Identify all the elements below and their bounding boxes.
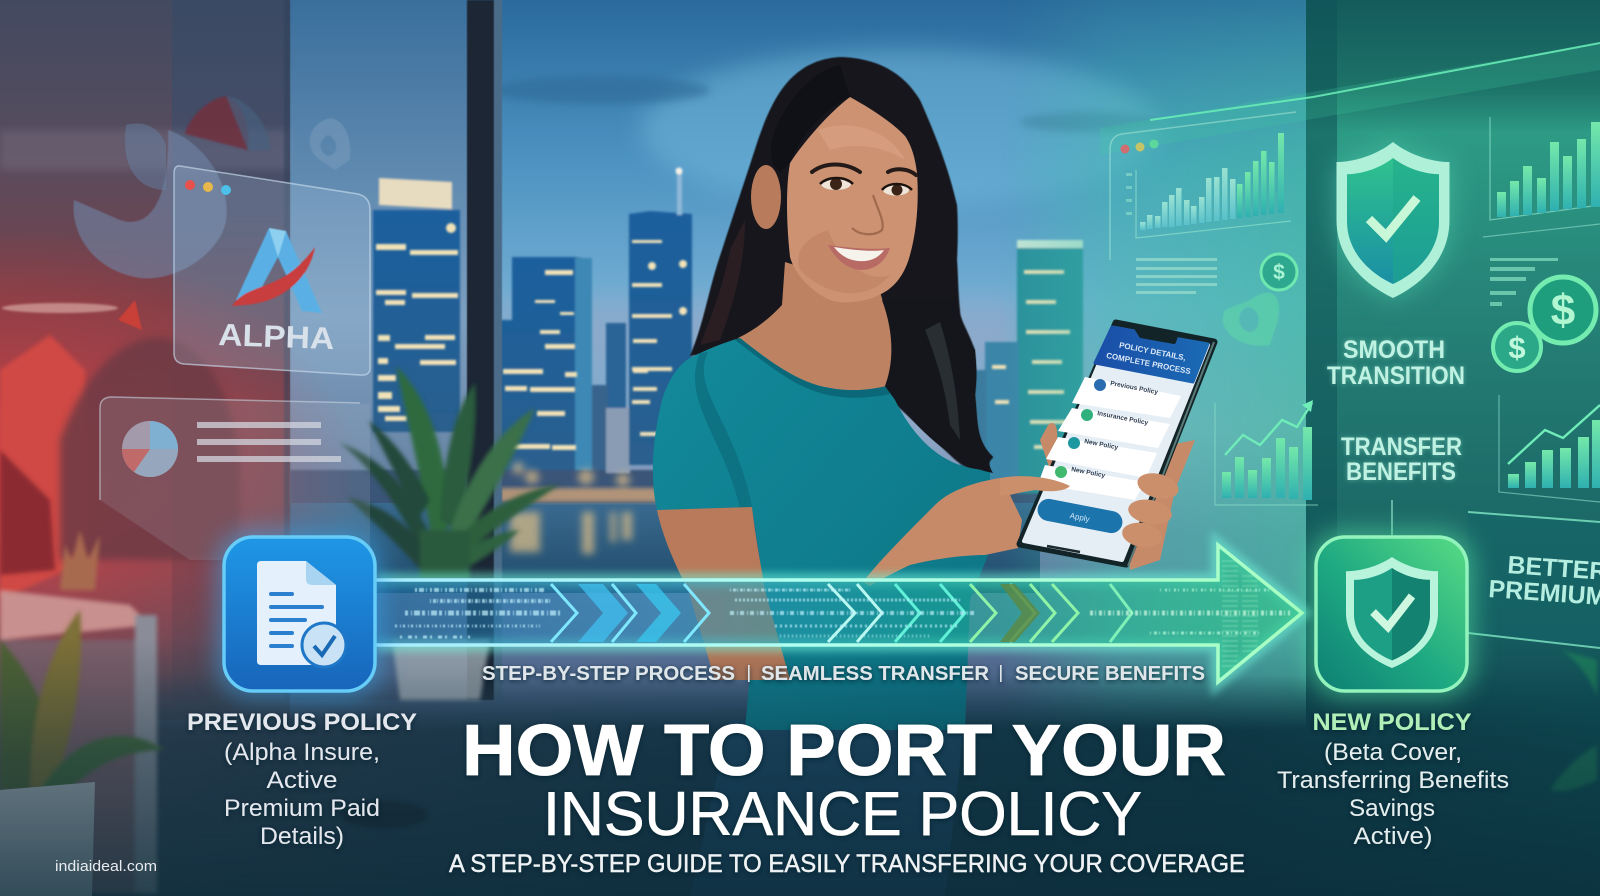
arrow body bbox=[376, 545, 1302, 682]
phone header text: POLICY DETAILS, bbox=[1118, 341, 1187, 362]
bar chart: top left bbox=[1126, 133, 1291, 238]
waterfront and reflections bbox=[280, 462, 1040, 593]
phone button bbox=[1036, 497, 1124, 535]
right interior wall bbox=[1000, 0, 1600, 740]
phone rows: Previous Policy bbox=[1110, 380, 1159, 396]
plant left foreground bbox=[0, 610, 165, 800]
face bbox=[787, 97, 918, 302]
tagline row: STEP-BY-STEP PROCESS bbox=[482, 663, 735, 685]
phone app mockup bbox=[1000, 323, 1214, 566]
line chart with bars: lower left bbox=[1215, 400, 1318, 505]
panel: green glass band and chart dashboard bbox=[1100, 43, 1600, 791]
arrow glow bbox=[376, 545, 1302, 682]
neck and chest bbox=[738, 262, 895, 390]
icon: new policy shield bbox=[1309, 530, 1474, 698]
better premium label bbox=[1468, 512, 1600, 648]
title bbox=[462, 711, 1226, 849]
icon: large dollar coins bbox=[1493, 277, 1596, 371]
right hand behind phone bbox=[1040, 423, 1195, 570]
alpha label: ALPHA bbox=[218, 317, 335, 356]
transfer benefits label: TRANSFER bbox=[1341, 433, 1462, 461]
window pillar bbox=[467, 0, 502, 700]
icon: dollar coin small bbox=[1261, 254, 1297, 290]
phone rows: Insurance Policy bbox=[1097, 410, 1149, 427]
new policy caption: Active) bbox=[1354, 823, 1432, 850]
front hair lock over shirt bbox=[882, 300, 993, 473]
icon: previous policy document bbox=[217, 530, 382, 698]
icon: large dollar coins: $ bbox=[1551, 286, 1575, 335]
new policy caption bbox=[1277, 709, 1509, 850]
left desk and plant scene bbox=[0, 450, 490, 896]
tagline row: SECURE BENEFITS bbox=[1015, 663, 1205, 685]
panel outline left dashboard bbox=[1110, 112, 1296, 260]
smooth transition label: TRANSITION bbox=[1327, 362, 1465, 390]
window dots green panel bbox=[1120, 140, 1158, 154]
smile bbox=[828, 245, 890, 270]
title: INSURANCE POLICY bbox=[543, 780, 1142, 849]
previous policy caption bbox=[187, 709, 417, 850]
new policy caption: NEW POLICY bbox=[1312, 709, 1472, 736]
previous policy caption: Premium Paid bbox=[224, 795, 380, 822]
bar chart: top right bbox=[1483, 117, 1600, 237]
front hair bbox=[771, 65, 850, 172]
window dots bbox=[185, 180, 231, 195]
office plant in front of window bbox=[340, 366, 560, 580]
phone rows bbox=[1038, 377, 1181, 500]
arrow outline bbox=[376, 545, 1302, 682]
previous policy caption: Details) bbox=[260, 823, 344, 850]
icon: alpha logo bbox=[232, 228, 322, 313]
progress arrow bbox=[376, 545, 1302, 682]
transfer benefits label: BENEFITS bbox=[1346, 458, 1456, 486]
shirt bbox=[653, 338, 990, 730]
panel: alpha insure window bbox=[174, 166, 370, 375]
floor bbox=[155, 680, 1600, 896]
bottom dark fade bbox=[0, 640, 1600, 896]
phone button: Apply bbox=[1069, 511, 1090, 524]
chevrons bbox=[551, 584, 1132, 642]
transfer benefits label bbox=[1341, 433, 1462, 486]
text lines left dashboard bbox=[1136, 258, 1217, 294]
watermark: indiaideal.com bbox=[55, 858, 157, 875]
left interior wall with red tint bbox=[0, 0, 360, 730]
foliage right edge bbox=[1550, 650, 1597, 791]
city skyline bbox=[280, 168, 1100, 593]
icon: large shield with check bbox=[1336, 142, 1450, 298]
smooth transition label bbox=[1327, 336, 1465, 390]
text lines bbox=[197, 422, 341, 462]
icon: dollar coin small: $ bbox=[1273, 261, 1285, 284]
ear bbox=[751, 165, 781, 229]
new policy caption: (Beta Cover, bbox=[1324, 739, 1462, 766]
icon: faded ring bbox=[1223, 293, 1279, 346]
eyes bbox=[820, 178, 912, 196]
phone rows: New Policy bbox=[1084, 438, 1119, 452]
title: HOW TO PORT YOUR bbox=[462, 711, 1226, 791]
arm and hand holding phone stylus bbox=[657, 507, 790, 680]
eyebrows bbox=[812, 164, 916, 175]
pie chart icon bbox=[122, 421, 178, 477]
smooth transition label: SMOOTH bbox=[1343, 336, 1445, 364]
new policy caption: Transferring Benefits bbox=[1277, 767, 1509, 794]
tagline row bbox=[482, 663, 1205, 685]
nose bbox=[852, 195, 883, 234]
previous policy caption: (Alpha Insure, bbox=[224, 739, 380, 766]
fingers bbox=[1000, 469, 1181, 550]
tagline row: SEAMLESS TRANSFER bbox=[761, 663, 990, 685]
panel: previous policy details window bbox=[100, 397, 370, 560]
line chart with bars: lower right bbox=[1499, 395, 1600, 502]
phone rows: New Policy bbox=[1071, 466, 1106, 480]
data streams bbox=[395, 560, 1290, 670]
previous policy caption: Active bbox=[266, 767, 338, 794]
text lines right dashboard bbox=[1490, 258, 1558, 306]
previous policy caption: PREVIOUS POLICY bbox=[187, 709, 417, 736]
woman figure bbox=[653, 57, 1195, 896]
back hair bbox=[690, 57, 993, 473]
icon: large dollar coins: $ bbox=[1508, 330, 1526, 365]
subtitle: A STEP-BY-STEP GUIDE TO EASILY TRANSFERING YOUR COVERAGE bbox=[449, 850, 1245, 878]
new policy caption: Savings bbox=[1349, 795, 1435, 822]
connector line to new policy bbox=[1391, 500, 1393, 535]
jeans bbox=[690, 720, 965, 896]
phone header text: COMPLETE PROCESS bbox=[1106, 351, 1192, 376]
